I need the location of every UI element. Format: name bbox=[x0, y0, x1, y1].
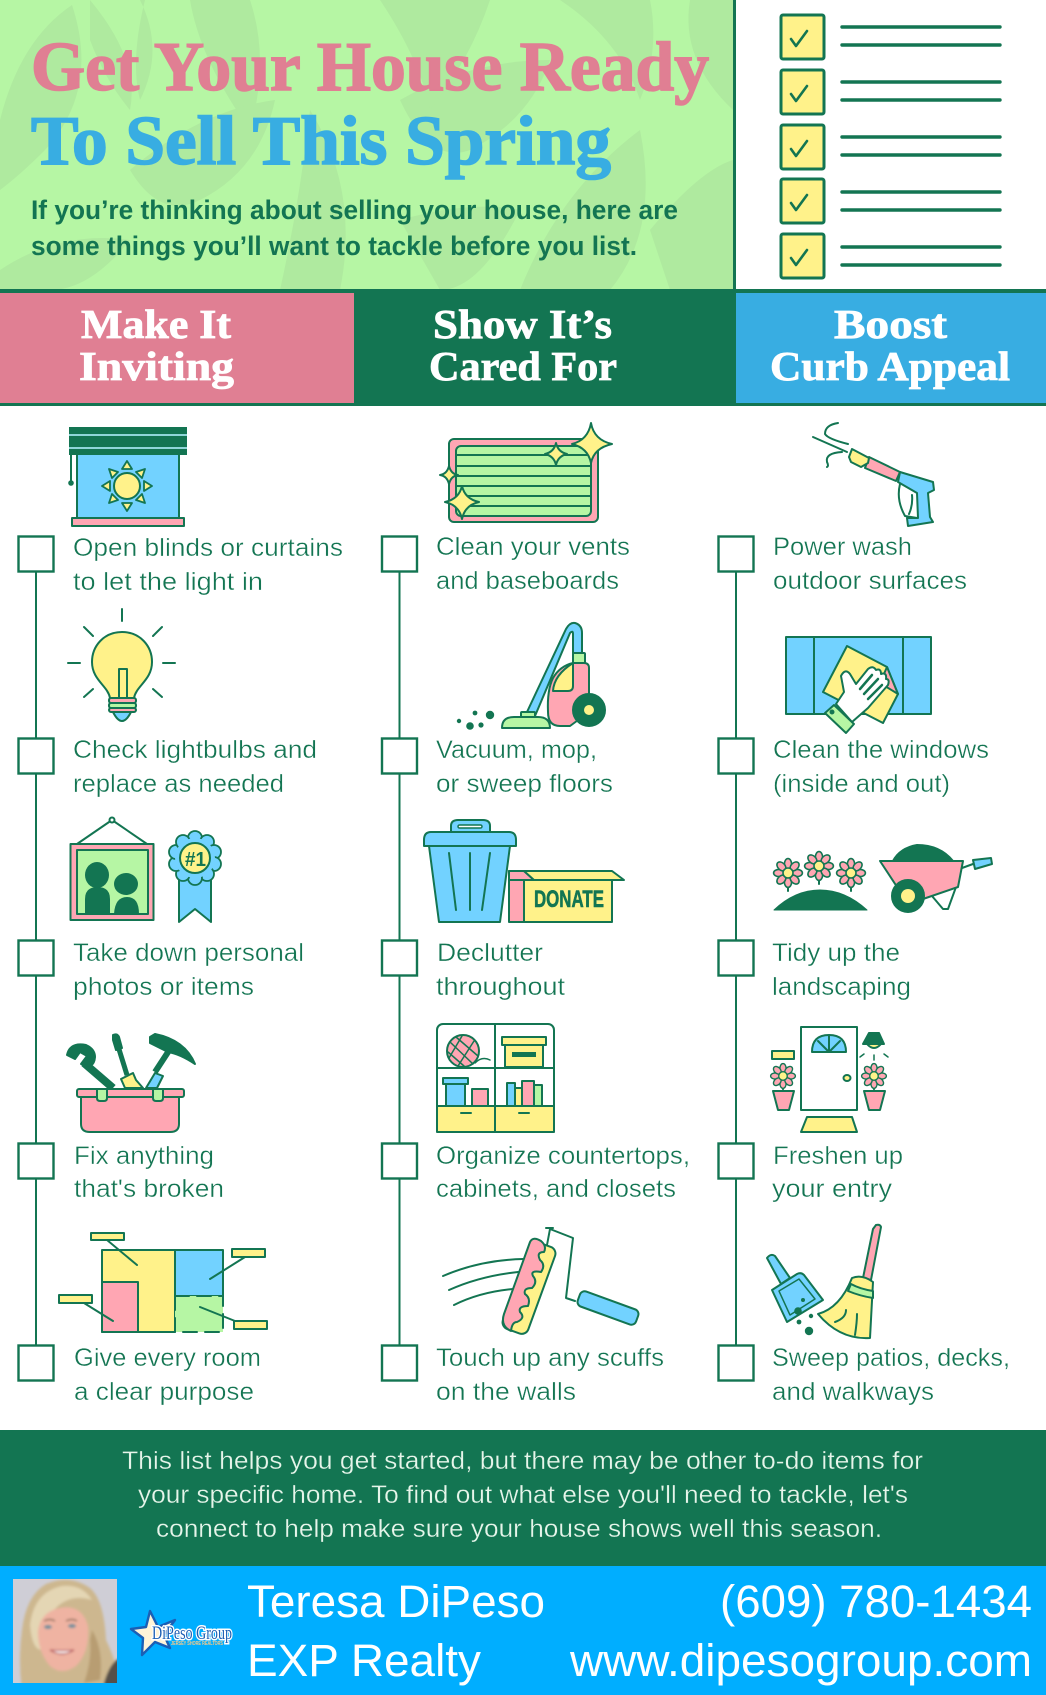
icon: framed photo and ribbon: #1 bbox=[185, 849, 206, 871]
label: organize: cabinets, and closets bbox=[436, 1175, 676, 1203]
label: declutter bbox=[436, 939, 565, 1001]
icon: floor plan bbox=[59, 1233, 267, 1332]
closing message panel: This list helps you get started, but there may be other to-do items for bbox=[122, 1447, 923, 1475]
label: organize: Organize countertops, bbox=[436, 1142, 690, 1170]
label: vacuum bbox=[436, 736, 613, 798]
column heading: Make It Inviting: Make It bbox=[81, 301, 231, 347]
label: clean windows: (inside and out) bbox=[773, 770, 950, 798]
label: take down photos bbox=[73, 939, 304, 1001]
label: open blinds bbox=[73, 534, 343, 596]
icon: trash can and donate box: DONATE bbox=[534, 886, 604, 913]
label: declutter: Declutter bbox=[437, 939, 543, 967]
closing message panel: your specific home. To find out what else you'll need to tackle, let's bbox=[138, 1481, 908, 1509]
label: sweep patios: Sweep patios, decks, bbox=[772, 1344, 1010, 1372]
label: take down photos: photos or items bbox=[73, 973, 254, 1001]
column heading: Show It's Cared For: Cared For bbox=[429, 343, 617, 389]
title: To Sell This Spring bbox=[31, 103, 611, 180]
intro text: some things you’ll want to tackle before you list. bbox=[31, 231, 637, 261]
checklist illustration bbox=[781, 15, 1000, 278]
icon: dustpan and broom bbox=[767, 1225, 881, 1338]
column header band bbox=[0, 289, 1046, 406]
label: touch up: on the walls bbox=[436, 1378, 576, 1406]
column heading: Boost Curb Appeal: Curb Appeal bbox=[770, 343, 1010, 389]
label: open blinds: Open blinds or curtains bbox=[73, 534, 343, 562]
icon: framed photo and ribbon bbox=[70, 818, 221, 922]
label: tidy landscaping: landscaping bbox=[772, 973, 911, 1001]
column heading: Boost Curb Appeal bbox=[736, 293, 1046, 403]
icon: cleaning window bbox=[786, 637, 931, 733]
column heading: Boost Curb Appeal: Boost bbox=[834, 301, 947, 347]
icon: organized cabinet bbox=[437, 1024, 554, 1132]
icon: front entry bbox=[771, 1027, 888, 1132]
column heading: Show It's Cared For bbox=[429, 301, 617, 389]
label: open blinds: to let the light in bbox=[73, 568, 263, 596]
label: check lightbulbs: replace as needed bbox=[73, 770, 284, 798]
icon: window blinds with sun bbox=[69, 427, 187, 526]
label: power wash: Power wash bbox=[773, 533, 912, 561]
DiPeso Group logo bbox=[131, 1611, 232, 1655]
icon: toolbox bbox=[67, 1034, 195, 1132]
phone and website: www.dipesogroup.com bbox=[569, 1635, 1032, 1686]
label: declutter: throughout bbox=[436, 973, 565, 1001]
label: clean vents bbox=[436, 533, 630, 595]
label: take down photos: Take down personal bbox=[73, 939, 304, 967]
label: freshen entry: your entry bbox=[772, 1175, 893, 1203]
label: touch up bbox=[436, 1344, 664, 1406]
label: give every room: Give every room bbox=[74, 1344, 261, 1372]
icon: trash can and donate box bbox=[424, 820, 624, 922]
agent name and brokerage: Teresa DiPeso bbox=[247, 1576, 545, 1627]
label: clean vents: Clean your vents bbox=[436, 533, 630, 561]
column heading: Make It Inviting: Inviting bbox=[79, 343, 235, 389]
label: organize bbox=[436, 1142, 690, 1203]
icon: clean vent bbox=[440, 423, 612, 522]
label: power wash bbox=[773, 533, 967, 595]
icon: light bulb bbox=[68, 609, 175, 721]
phone and website: (609) 780-1434 bbox=[720, 1576, 1032, 1627]
label: power wash: outdoor surfaces bbox=[773, 567, 967, 595]
closing message panel: connect to help make sure your house shows well this season. bbox=[156, 1515, 882, 1543]
label: check lightbulbs: Check lightbulbs and bbox=[73, 736, 317, 764]
label: fix anything: Fix anything bbox=[74, 1142, 214, 1170]
label: freshen entry bbox=[772, 1142, 903, 1203]
label: fix anything bbox=[74, 1142, 224, 1203]
header panel bbox=[0, 0, 733, 290]
label: sweep patios: and walkways bbox=[772, 1378, 934, 1406]
timeline column 1 bbox=[18, 536, 54, 1380]
DiPeso Group logo: JERSEY SHORE REALTORS bbox=[171, 1641, 224, 1647]
agent name and brokerage bbox=[247, 1576, 545, 1686]
label: touch up: Touch up any scuffs bbox=[436, 1344, 664, 1372]
phone and website bbox=[569, 1576, 1032, 1686]
label: check lightbulbs bbox=[73, 736, 317, 798]
intro text bbox=[31, 195, 678, 261]
agent photo bbox=[13, 1579, 117, 1683]
DiPeso Group logo: DiPeso Group bbox=[152, 1623, 232, 1644]
label: tidy landscaping: Tidy up the bbox=[772, 939, 900, 967]
closing message panel bbox=[0, 1430, 1046, 1566]
label: clean windows bbox=[773, 736, 989, 798]
label: vacuum: or sweep floors bbox=[436, 770, 613, 798]
agent name and brokerage: EXP Realty bbox=[247, 1635, 481, 1686]
timeline column 2 bbox=[382, 536, 417, 1380]
icon: paint roller bbox=[443, 1228, 640, 1336]
icon: flowers and wheelbarrow bbox=[774, 845, 992, 912]
label: give every room bbox=[74, 1344, 261, 1406]
timeline column 3 bbox=[718, 536, 754, 1380]
agent contact bar bbox=[0, 1566, 1046, 1695]
column heading: Show It's Cared For: Show It’s bbox=[433, 301, 612, 347]
label: give every room: a clear purpose bbox=[74, 1378, 254, 1406]
title bbox=[31, 29, 709, 180]
intro text: If you’re thinking about selling your house, here are bbox=[31, 195, 678, 225]
label: clean windows: Clean the windows bbox=[773, 736, 989, 764]
label: sweep patios bbox=[772, 1344, 1010, 1406]
label: freshen entry: Freshen up bbox=[773, 1142, 903, 1170]
label: fix anything: that's broken bbox=[74, 1175, 224, 1203]
column heading: Make It Inviting bbox=[0, 293, 354, 403]
icon: power washer bbox=[813, 423, 934, 526]
label: clean vents: and baseboards bbox=[436, 567, 619, 595]
icon: vacuum bbox=[457, 623, 605, 730]
label: tidy landscaping bbox=[772, 939, 911, 1001]
label: vacuum: Vacuum, mop, bbox=[436, 736, 597, 764]
title: Get Your House Ready bbox=[31, 29, 709, 106]
